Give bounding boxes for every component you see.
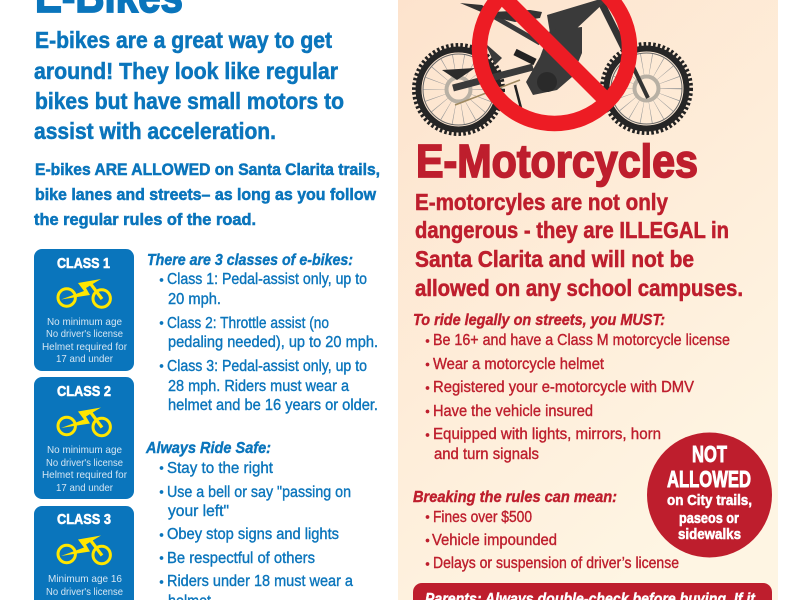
list: ride safe rules	[160, 460, 353, 600]
class 1 requirements: Helmet required for	[42, 341, 127, 353]
class 2 requirements: 17 and under	[56, 482, 113, 494]
intro text block: E-bikes are a great way to get	[35, 27, 332, 53]
list: ride safe rules: Stay to the right	[167, 460, 274, 477]
intro text block: assist with acceleration.	[34, 118, 276, 144]
panel: e-bikes	[34, 0, 380, 600]
list: ride safe rules: Obey stop signs and lights	[167, 526, 339, 543]
heading: E-Motorcycles: E-Motorcycles	[416, 135, 698, 187]
list: legal requirements: and turn signals	[434, 446, 539, 463]
class 1 requirements: No minimum age	[47, 316, 122, 328]
list: e-bike classes: 20 mph.	[168, 291, 221, 308]
intro text block: dangerous - they are ILLEGAL in	[415, 217, 729, 243]
callout: parents banner	[413, 583, 772, 600]
intro text block: Santa Clarita and will not be	[415, 246, 694, 272]
intro text block: allowed on any school campuses.	[415, 275, 743, 301]
class 3 requirements: No driver's license	[46, 586, 123, 598]
intro text block: bikes but have small motors to	[35, 88, 344, 114]
list: penalties	[426, 509, 679, 572]
list: ride safe rules: Be respectful of others	[167, 550, 315, 567]
icon: e-motorcycle photo	[414, 0, 691, 134]
heading: always ride safe: Always Ride Safe:	[145, 440, 271, 457]
class 1 requirements	[42, 316, 127, 365]
class 3 requirements	[46, 573, 123, 598]
icon: class 3 e-bike	[58, 536, 110, 564]
intro text block	[415, 189, 743, 301]
panel: class 3 card	[34, 506, 134, 600]
allowed text block: the regular rules of the road.	[34, 210, 256, 229]
list: e-bike classes: Class 3: Pedal-assist only, up to	[167, 358, 367, 375]
class 3 label: CLASS 3	[57, 512, 111, 528]
class 1 requirements: No driver's license	[46, 328, 123, 340]
list: penalties: Fines over $500	[433, 509, 532, 526]
heading: classes of e-bikes: There are 3 classes of e-bikes:	[147, 252, 353, 269]
list: ride safe rules: your left"	[168, 503, 229, 520]
list: legal requirements	[426, 332, 730, 463]
callout: not allowed badge: ALLOWED	[667, 466, 751, 492]
callout: not allowed badge: on City trails,	[667, 492, 752, 509]
panel: class 2 card	[34, 377, 134, 499]
icon: class 1 e-bike	[58, 279, 110, 307]
list: legal requirements: Be 16+ and have a Class M motorcycle license	[433, 332, 730, 349]
callout: not allowed badge: paseos or	[679, 510, 739, 527]
list: e-bike classes	[160, 271, 378, 414]
list: penalties: Delays or suspension of driver’s license	[433, 555, 679, 572]
panel: class 1 card	[34, 249, 134, 371]
allowed text block: bike lanes and streets– as long as you follow	[35, 185, 377, 204]
callout: not allowed badge: sidewalks	[678, 526, 741, 543]
list: ride safe rules: Riders under 18 must wear a	[167, 573, 353, 590]
class 3 requirements: Minimum age 16	[48, 573, 122, 585]
class 2 label: CLASS 2	[57, 384, 111, 400]
list: ride safe rules: Use a bell or say "passing on	[167, 484, 351, 501]
intro text block: around! They look like regular	[34, 58, 338, 84]
class 2 requirements: Helmet required for	[42, 469, 127, 481]
callout: not allowed badge	[647, 432, 772, 558]
heading: breaking the rules: Breaking the rules can mean:	[413, 489, 617, 506]
intro text block	[34, 27, 344, 144]
list: legal requirements: Registered your e-motorcycle with DMV	[433, 379, 694, 396]
icon: prohibition sign	[480, 0, 630, 124]
intro text block: E-motorcyles are not only	[415, 189, 668, 215]
list: e-bike classes: Class 2: Throttle assist (no	[167, 315, 329, 332]
callout: not allowed badge: NOT	[692, 441, 727, 467]
list: e-bike classes: helmet and be 16 years or older.	[168, 397, 378, 414]
class 2 requirements: No minimum age	[47, 444, 122, 456]
class 1 requirements: 17 and under	[56, 353, 113, 365]
icon: class 2 e-bike	[58, 408, 110, 436]
class 2 requirements: No driver's license	[46, 457, 123, 469]
allowed text block	[34, 160, 380, 229]
panel: e-motorcycles	[398, 0, 778, 600]
list: legal requirements: Have the vehicle insured	[433, 403, 593, 420]
class 1 label: CLASS 1	[57, 256, 110, 272]
heading: ride legally: To ride legally on streets, you MUST:	[413, 312, 665, 329]
allowed text block: E-bikes ARE ALLOWED on Santa Clarita trails,	[35, 160, 380, 179]
list: e-bike classes: Class 1: Pedal-assist only, up to	[167, 271, 367, 288]
list: legal requirements: Wear a motorcycle helmet	[433, 356, 605, 373]
list: e-bike classes: 28 mph. Riders must wear a	[168, 378, 349, 395]
list: legal requirements: Equipped with lights, mirrors, horn	[433, 426, 661, 443]
list: e-bike classes: pedaling needed), up to 20 mph.	[168, 334, 378, 351]
class 2 requirements	[42, 444, 127, 494]
list: penalties: Vehicle impounded	[432, 532, 557, 549]
